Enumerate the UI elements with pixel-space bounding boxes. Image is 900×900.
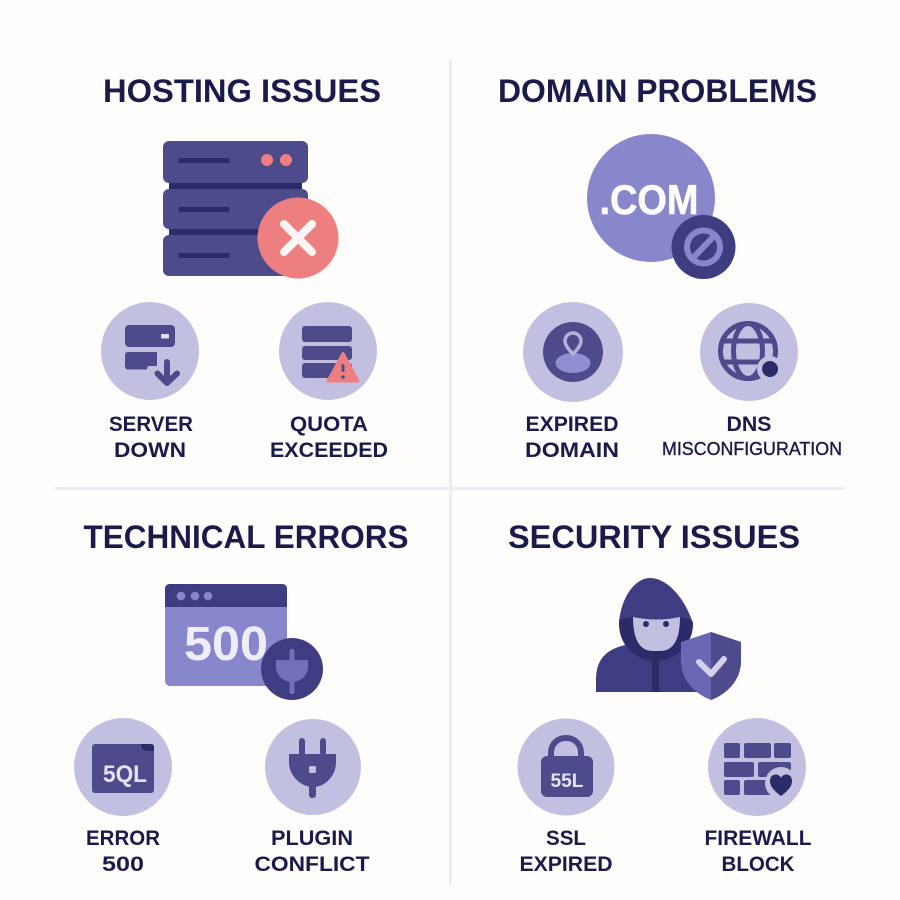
label: quota exceeded: QUOTA xyxy=(290,413,368,436)
icon: browser error 500: 500 xyxy=(184,618,268,671)
heading: technical errors: TECHNICAL ERRORS xyxy=(84,519,408,555)
icon: blocked .com domain: .COM xyxy=(600,176,698,223)
heading: domain problems: DOMAIN PROBLEMS xyxy=(498,73,817,109)
icon: ssl lock: 55L xyxy=(550,771,584,792)
label: dns misconfiguration: MISCONFIGURATION xyxy=(662,438,842,459)
icon: quota exceeded xyxy=(279,302,377,400)
panel: hosting issues xyxy=(101,73,388,462)
icon: sql error xyxy=(74,718,172,816)
icon: ssl lock xyxy=(518,718,614,816)
label: firewall block: BLOCK xyxy=(722,853,794,876)
icon: plugin xyxy=(265,719,361,815)
label: plugin conflict xyxy=(254,827,370,876)
label: error 500 xyxy=(86,827,160,876)
label: quota exceeded: EXCEEDED xyxy=(270,439,388,462)
label: plugin conflict: PLUGIN xyxy=(271,827,353,850)
icon: expired domain xyxy=(523,302,623,402)
label: firewall block xyxy=(704,827,812,876)
icon: browser error 500 xyxy=(165,584,323,700)
label: expired domain: DOMAIN xyxy=(525,439,619,462)
icon: blocked .com domain xyxy=(587,134,736,279)
label: plugin conflict: CONFLICT xyxy=(254,853,370,876)
label: dns misconfiguration xyxy=(662,413,842,459)
label: dns misconfiguration: DNS xyxy=(726,413,772,436)
label: server down xyxy=(109,413,193,462)
label: server down: SERVER xyxy=(109,413,193,436)
label: firewall block: FIREWALL xyxy=(704,827,812,850)
icon: server down xyxy=(101,302,199,400)
label: quota exceeded xyxy=(270,413,388,462)
label: expired domain: EXPIRED xyxy=(526,413,618,436)
heading: hosting issues: HOSTING ISSUES xyxy=(103,73,381,109)
label: server down: DOWN xyxy=(114,439,186,462)
heading: security issues: SECURITY ISSUES xyxy=(508,519,800,555)
label: ssl expired: SSL xyxy=(546,827,586,850)
icon: sql error: 5QL xyxy=(103,761,147,788)
icon: server stack with error xyxy=(163,141,338,278)
icon: hacker with shield xyxy=(596,578,741,700)
icon: firewall block xyxy=(708,718,806,816)
panel: security issues xyxy=(508,519,812,876)
panel: technical errors xyxy=(74,519,408,876)
label: expired domain xyxy=(525,413,619,462)
label: ssl expired: EXPIRED xyxy=(520,853,612,876)
label: ssl expired xyxy=(520,827,612,876)
icon: dns misconfiguration xyxy=(700,303,798,401)
label: error 500: 500 xyxy=(102,853,144,876)
panel: domain problems xyxy=(498,73,842,462)
label: error 500: ERROR xyxy=(86,827,160,850)
